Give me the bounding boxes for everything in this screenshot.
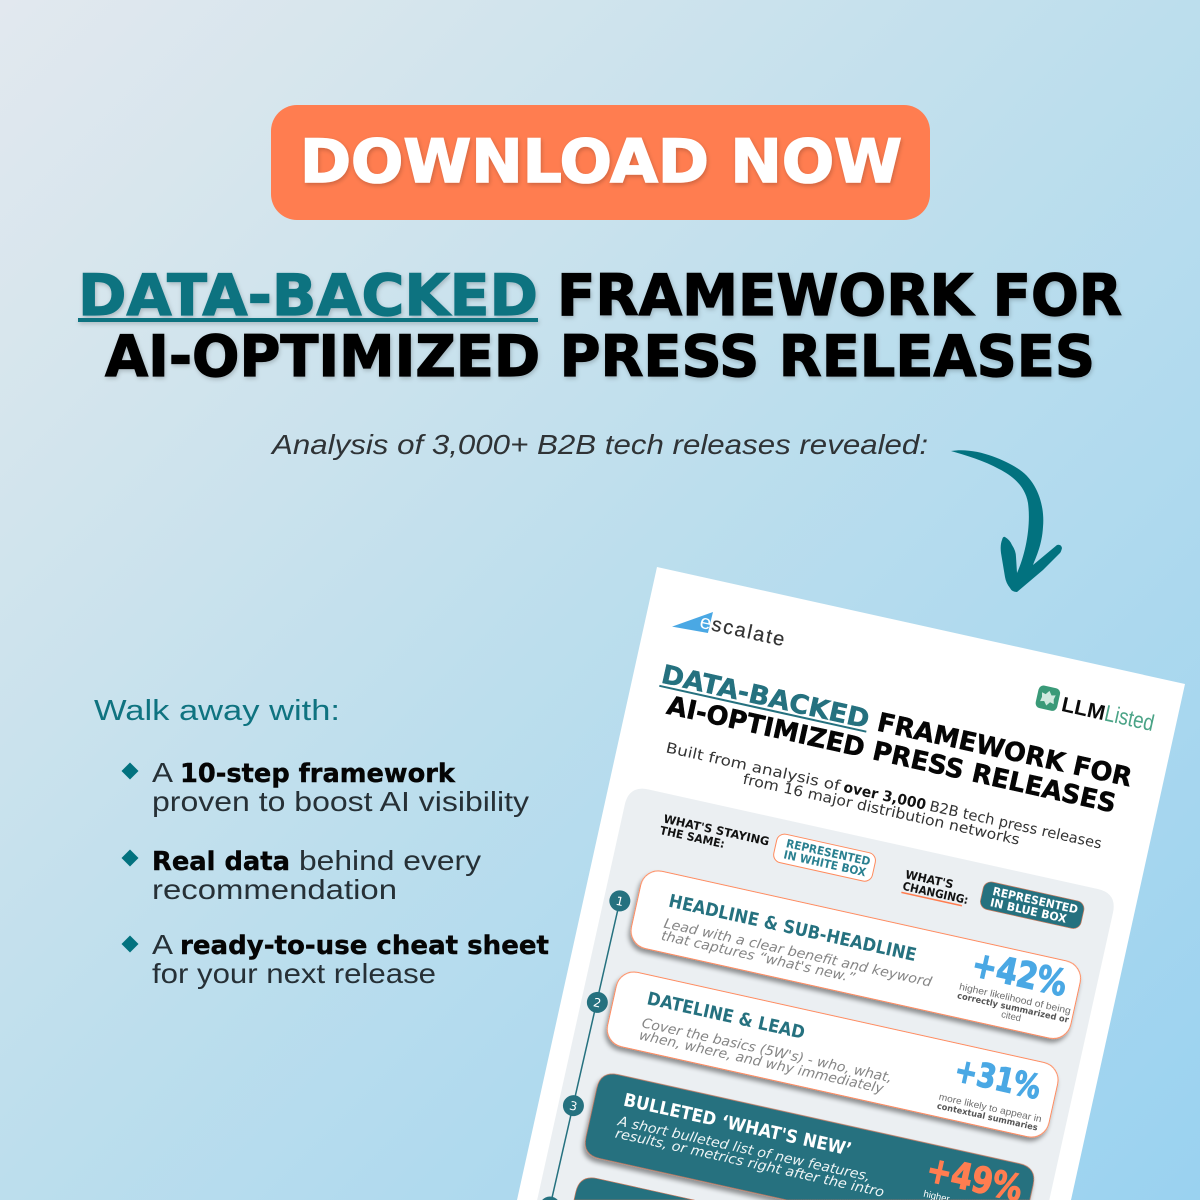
legend: blue box: IN BLUE BOX bbox=[989, 895, 1068, 926]
card 2: dateline and lead: +31% bbox=[951, 1050, 1045, 1107]
sheet subtitle: over 3,000 bbox=[842, 780, 927, 814]
bullet 3: ready-to-use cheat sheet bbox=[180, 931, 549, 961]
bullet 2: Real data bbox=[152, 847, 290, 877]
legend bbox=[658, 807, 1086, 932]
logo: LLMListed: LLM bbox=[1059, 693, 1107, 725]
logo: LLMListed: Listed bbox=[1102, 700, 1157, 736]
bullet 2 bbox=[122, 845, 481, 905]
subtitle: Analysis of 3,000+ B2B tech releases revealed: bbox=[270, 429, 928, 460]
card 2: dateline and lead: contextual summaries bbox=[936, 1101, 1039, 1134]
step 3 bbox=[561, 1093, 586, 1118]
title: AI-OPTIMIZED PRESS RELEASES bbox=[105, 324, 1095, 390]
card 1: headline and sub-headline: that captures “what's new.” bbox=[660, 928, 857, 987]
button: download now: DOWNLOAD NOW bbox=[300, 127, 902, 197]
card 1: headline and sub-headline: correctly summarized or bbox=[956, 991, 1070, 1026]
sheet subtitle: from 16 major distribution networks bbox=[741, 772, 1021, 849]
legend: changing: WHAT'S bbox=[904, 867, 955, 891]
bullet 2: recommendation bbox=[152, 874, 397, 905]
legend: white box: REPRESENTED bbox=[785, 836, 872, 868]
bullet list bbox=[122, 757, 549, 989]
legend: staying the same: WHAT'S STAYING bbox=[662, 812, 771, 849]
arrow bbox=[951, 450, 1062, 592]
sheet title: FRAMEWORK FOR bbox=[874, 708, 1135, 793]
legend: staying the same: THE SAME: bbox=[659, 823, 726, 851]
bullet 2: behind every bbox=[299, 845, 481, 876]
card 3: bulleted what's new: BULLETED ‘WHAT'S NEW’ bbox=[622, 1090, 854, 1161]
sheet subtitle: Built from analysis of bbox=[664, 740, 843, 795]
card 2: dateline and lead: more likely to appear in bbox=[938, 1092, 1043, 1125]
step 1: 1 bbox=[615, 894, 625, 909]
bullet 1 bbox=[122, 757, 529, 817]
sheet subtitle: B2B tech press releases bbox=[928, 799, 1103, 853]
card 1: headline and sub-headline bbox=[628, 867, 1084, 1042]
card 1: headline and sub-headline: Lead with a clear benefit and keyword bbox=[662, 916, 934, 991]
card 1: headline and sub-headline: HEADLINE & SUB-HEADLINE bbox=[667, 891, 918, 966]
card 2: dateline and lead: when, where, and why immediately bbox=[637, 1027, 886, 1097]
legend: blue box bbox=[979, 880, 1085, 930]
bullet 1: 10-step framework bbox=[180, 759, 456, 789]
step 3: 3 bbox=[568, 1099, 579, 1114]
bullet 3 bbox=[122, 929, 549, 989]
title: DATA-BACKED bbox=[78, 263, 538, 329]
sheet title: DATA-BACKED bbox=[659, 660, 872, 735]
bullet 1: proven to boost AI visibility bbox=[152, 786, 529, 817]
legend: changing bbox=[901, 867, 972, 908]
card 1: headline and sub-headline: +42% bbox=[968, 944, 1071, 1005]
logo: escalate: e bbox=[698, 611, 713, 635]
grey panel bbox=[537, 785, 1117, 1200]
title: FRAMEWORK FOR bbox=[557, 263, 1122, 329]
legend: white box bbox=[772, 833, 877, 883]
button: download now bbox=[271, 105, 930, 220]
bullet 1: A bbox=[152, 757, 173, 788]
card 1: headline and sub-headline: higher likelihood of being bbox=[958, 982, 1072, 1017]
card 2: dateline and lead: DATELINE & LEAD bbox=[645, 988, 807, 1044]
timeline bbox=[542, 888, 632, 1200]
logo: escalate bbox=[672, 604, 787, 651]
card 1: headline and sub-headline: cited bbox=[1000, 1009, 1022, 1024]
legend: blue box: REPRESENTED bbox=[991, 884, 1079, 917]
sheet title: AI-OPTIMIZED PRESS RELEASES bbox=[664, 691, 1119, 819]
card 3: bulleted what's new bbox=[582, 1071, 1037, 1200]
step 2: 2 bbox=[592, 995, 602, 1011]
bullet 3: A bbox=[152, 929, 173, 960]
sheet subtitle bbox=[661, 740, 1103, 866]
legend: white box: IN WHITE BOX bbox=[782, 847, 867, 879]
card 2: dateline and lead: Cover the basics (5W's) - who, what, bbox=[640, 1015, 894, 1086]
legend: changing: CHANGING: bbox=[901, 879, 970, 907]
bullet 3: for your next release bbox=[152, 958, 436, 989]
step 1 bbox=[607, 888, 632, 913]
card 3: bulleted what's new: results, or metrics right after the intro bbox=[614, 1126, 886, 1200]
card 2: dateline and lead bbox=[604, 969, 1062, 1141]
panel: cheat sheet preview bbox=[517, 567, 1185, 1200]
card 4: partially visible bbox=[574, 1175, 695, 1200]
logo: escalate: scalate bbox=[710, 614, 787, 651]
step 4 bbox=[542, 1195, 558, 1200]
heading: walk away with: Walk away with: bbox=[94, 695, 340, 727]
logo: LLMListed bbox=[1034, 685, 1157, 736]
card 3: bulleted what's new: A short bulleted list of new features, bbox=[615, 1113, 872, 1185]
step 2 bbox=[585, 990, 610, 1015]
title bbox=[78, 263, 1122, 390]
